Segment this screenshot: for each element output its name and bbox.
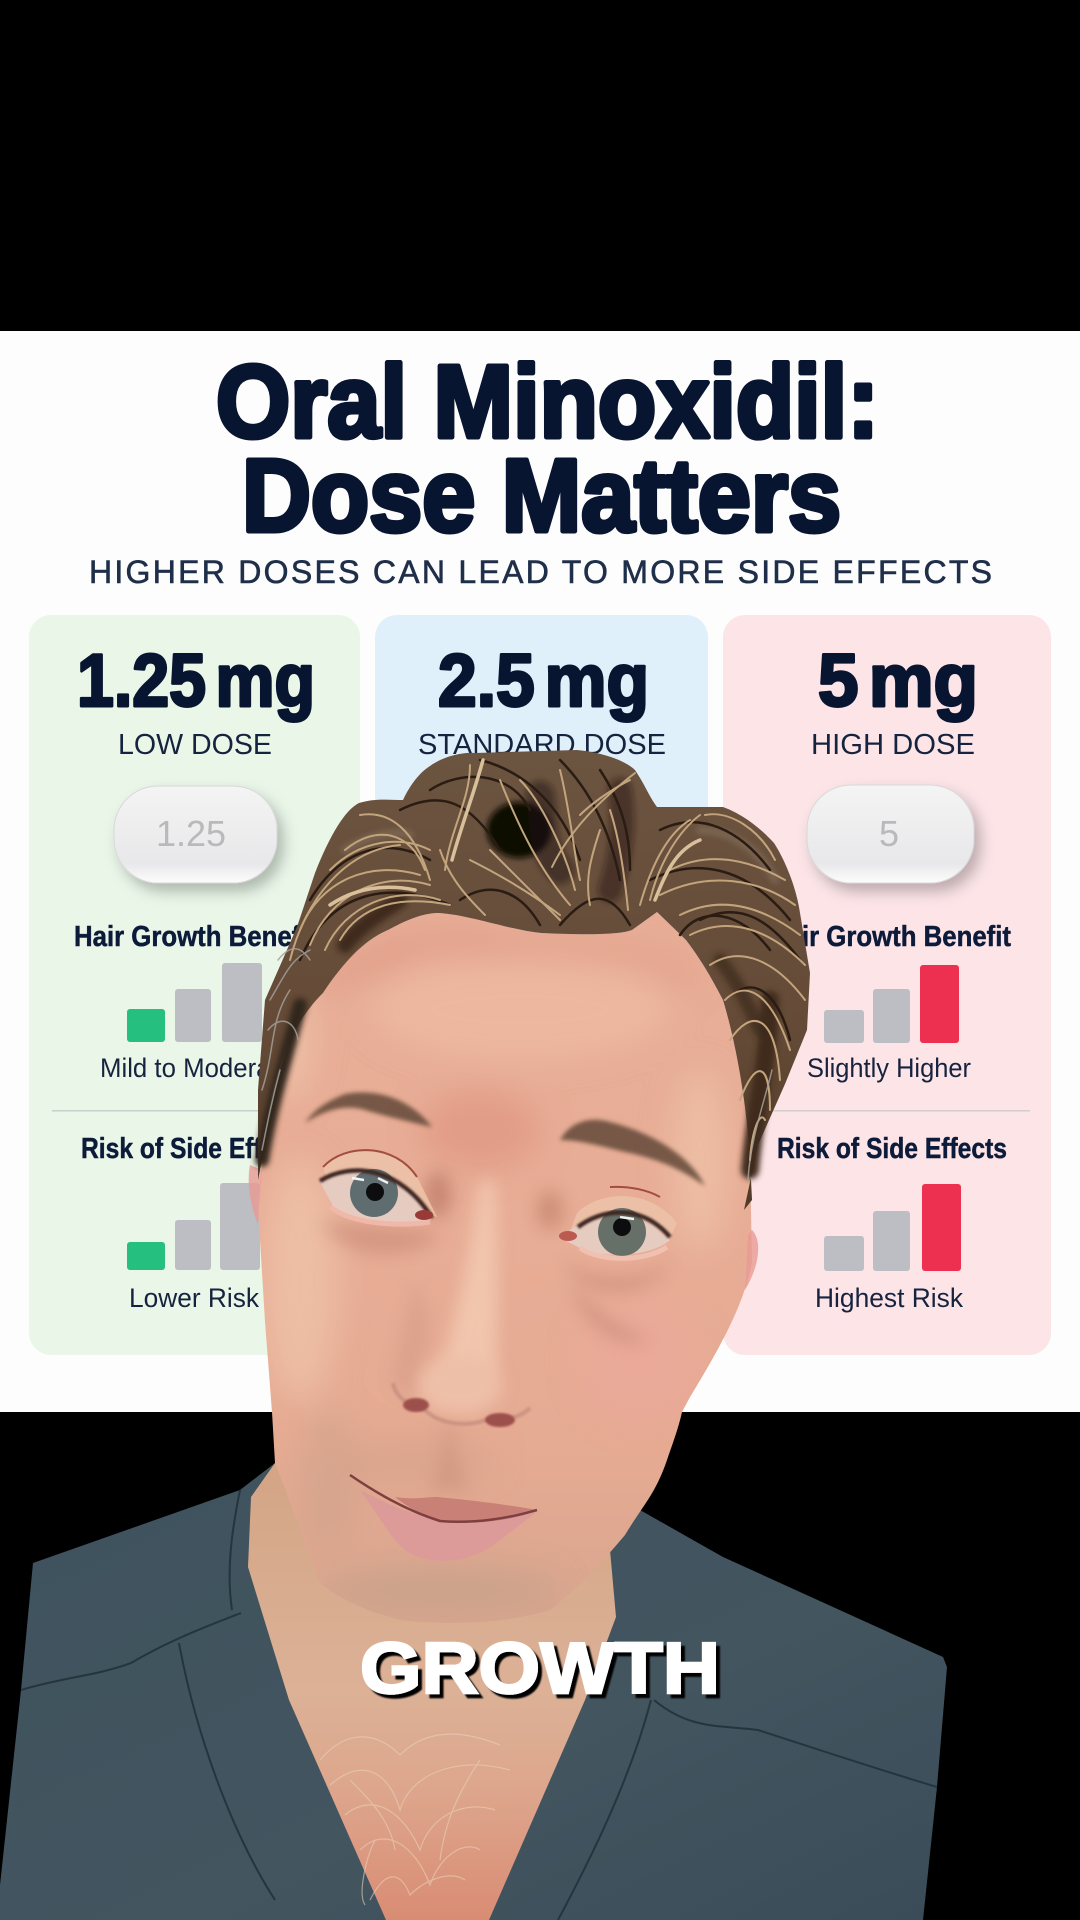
- left eyebrow: [305, 1092, 432, 1127]
- caption: GROWTH: GROWTH: [360, 1629, 720, 1709]
- under-eye shadows: [320, 1171, 672, 1343]
- scrub top: [0, 1463, 947, 1920]
- dose label: HIGH DOSE: [811, 729, 975, 761]
- right eyebrow: [560, 1120, 705, 1186]
- nose: [392, 1180, 530, 1490]
- title: Oral Minoxidil:: [216, 344, 879, 459]
- bar chart: benefit: [824, 965, 959, 1043]
- panel: high dose: [723, 615, 1051, 1355]
- benefit label: Mild to Moderate: [100, 1053, 292, 1083]
- icon: pill 1.25: [114, 786, 277, 883]
- chest hair: [320, 1734, 510, 1905]
- icon: pill 1.25: 1.25: [156, 813, 226, 854]
- icon: pill 5: [807, 785, 974, 883]
- face shading: [262, 934, 728, 1612]
- risk label: Lower Risk: [129, 1283, 259, 1313]
- heading: risk of side effects: Risk of Side Effects: [777, 1133, 1007, 1165]
- right eye: [559, 1187, 677, 1258]
- bar chart: risk: [127, 1183, 260, 1270]
- benefit label: Slightly Higher: [807, 1053, 971, 1083]
- title: Dose Matters: [242, 438, 841, 553]
- heading: risk of side effects: Risk of Side Effects: [81, 1133, 311, 1165]
- mouth: [350, 1475, 537, 1561]
- bar chart: benefit: [127, 963, 262, 1042]
- neck and chest: [248, 1463, 640, 1920]
- icon: pill 5: 5: [879, 813, 899, 854]
- left eye: [320, 1150, 437, 1224]
- panel: standard dose: [375, 615, 708, 1355]
- ears: [249, 1165, 758, 1290]
- dose amount: 1.25 mg: [77, 639, 315, 722]
- bar chart: risk: [824, 1184, 961, 1271]
- dose label: LOW DOSE: [118, 729, 272, 761]
- presenter: doctor in scrubs: [0, 750, 947, 1920]
- hair strands: [262, 760, 805, 1180]
- heading: hair growth benefit: Hair Growth Benefit: [74, 921, 316, 953]
- title: [216, 344, 879, 553]
- heading: hair growth benefit: Hair Growth Benefit: [769, 921, 1011, 953]
- panel: infographic sheet: [0, 331, 1080, 1412]
- dose amount: 2.5 mg: [438, 639, 649, 722]
- dose label: STANDARD DOSE: [418, 729, 666, 761]
- dose amount: 5 mg: [818, 639, 978, 722]
- hair: [258, 750, 810, 1210]
- face: [258, 912, 752, 1623]
- subtitle: HIGHER DOSES CAN LEAD TO MORE SIDE EFFECTS: [89, 554, 992, 590]
- risk label: Highest Risk: [815, 1283, 963, 1313]
- panel: low dose: [29, 615, 360, 1355]
